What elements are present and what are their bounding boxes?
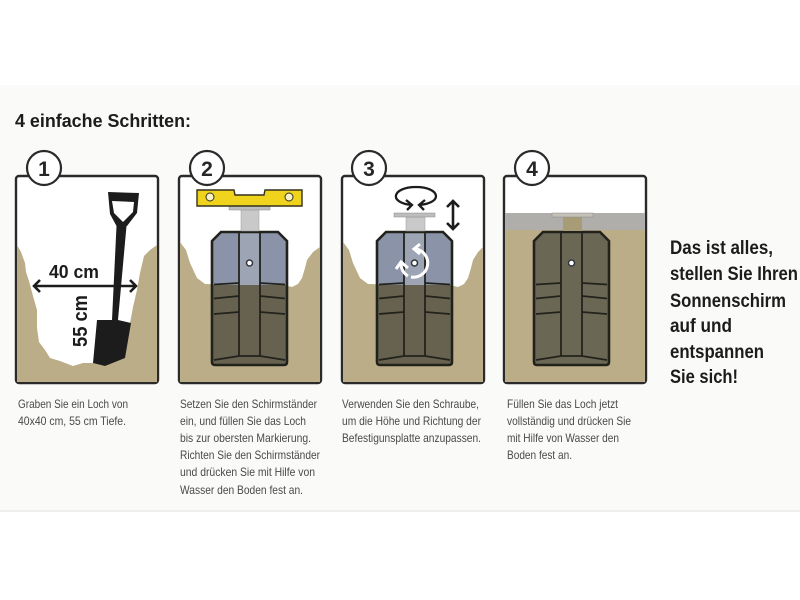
- soil with dug hole: [17, 245, 157, 382]
- badge: number 1: 1: [38, 158, 50, 181]
- badge: number 4: [515, 151, 549, 185]
- stem and plate: [229, 206, 270, 231]
- panel: step 1 dig the hole: [16, 176, 158, 383]
- caption: step 4: Füllen Sie das Loch jetzt: [507, 397, 619, 411]
- icon: spirit level: [197, 190, 302, 206]
- panel: step 3 adjust plate: [342, 176, 484, 383]
- badge: number 3: [352, 151, 386, 185]
- badge: number 1: [27, 151, 61, 185]
- soil: [505, 230, 645, 382]
- caption: step 4: vollständig und drücken Sie: [507, 414, 631, 428]
- caption: step 2: Richten Sie den Schirmständer: [180, 448, 320, 462]
- panel: step 2 insert stand: [179, 176, 321, 383]
- caption: step 4: mit Hilfe von Wasser den: [507, 431, 619, 445]
- caption: step 2: Setzen Sie den Schirmständer: [180, 397, 317, 411]
- closing message: Sie sich!: [670, 367, 738, 388]
- umbrella stand in hole: [377, 232, 452, 365]
- soil: [180, 242, 320, 382]
- icon: shovel: [93, 192, 139, 366]
- badge: number 2: 2: [201, 158, 213, 181]
- stem and plate: [394, 213, 435, 231]
- caption: step 2: Wasser den Boden fest an.: [180, 483, 303, 497]
- title: 4 einfache Schritten:: [15, 110, 191, 131]
- caption: step 2: ein, und füllen Sie das Loch: [180, 414, 306, 428]
- caption: step 1: 40x40 cm, 55 cm Tiefe.: [18, 414, 126, 428]
- badge: number 3: 3: [363, 158, 375, 181]
- umbrella stand in hole: [212, 232, 287, 365]
- badge: number 2: [190, 151, 224, 185]
- caption: step 3: Verwenden Sie den Schraube,: [342, 397, 479, 411]
- icon: rotate arrow above plate: [396, 187, 436, 210]
- umbrella stand buried: [534, 232, 609, 365]
- closing message: [670, 238, 798, 388]
- caption: step 2: und drücken Sie mit Hilfe von: [180, 465, 315, 479]
- icon: white rotation arrows: [396, 244, 428, 277]
- panel: step 4 fill hole: [504, 176, 646, 383]
- closing message: auf und: [670, 316, 732, 337]
- caption: step 1: Graben Sie ein Loch von: [18, 397, 128, 411]
- caption: step 3: Befestigunsplatte anzupassen.: [342, 431, 481, 445]
- badge: number 4: 4: [526, 158, 538, 181]
- caption: step 3: [342, 397, 481, 445]
- label: 55 cm: 55 cm: [70, 295, 92, 347]
- caption: step 2: bis zur obersten Markierung.: [180, 431, 311, 445]
- gravel layer: [505, 213, 645, 230]
- stem and plate: [552, 213, 593, 231]
- caption: step 4: [507, 397, 631, 462]
- soil: [343, 242, 483, 382]
- caption: step 4: Boden fest an.: [507, 448, 572, 462]
- caption: step 1: [18, 397, 128, 428]
- closing message: entspannen: [670, 342, 764, 363]
- label: 40 cm: 40 cm: [49, 261, 99, 282]
- caption: step 3: um die Höhe und Richtung der: [342, 414, 481, 428]
- closing message: Das ist alles,: [670, 238, 773, 259]
- caption: step 2: [180, 397, 320, 497]
- closing message: Sonnenschirm: [670, 291, 786, 312]
- arrow: width of hole: [34, 280, 136, 292]
- icon: up and down arrow: [447, 201, 459, 229]
